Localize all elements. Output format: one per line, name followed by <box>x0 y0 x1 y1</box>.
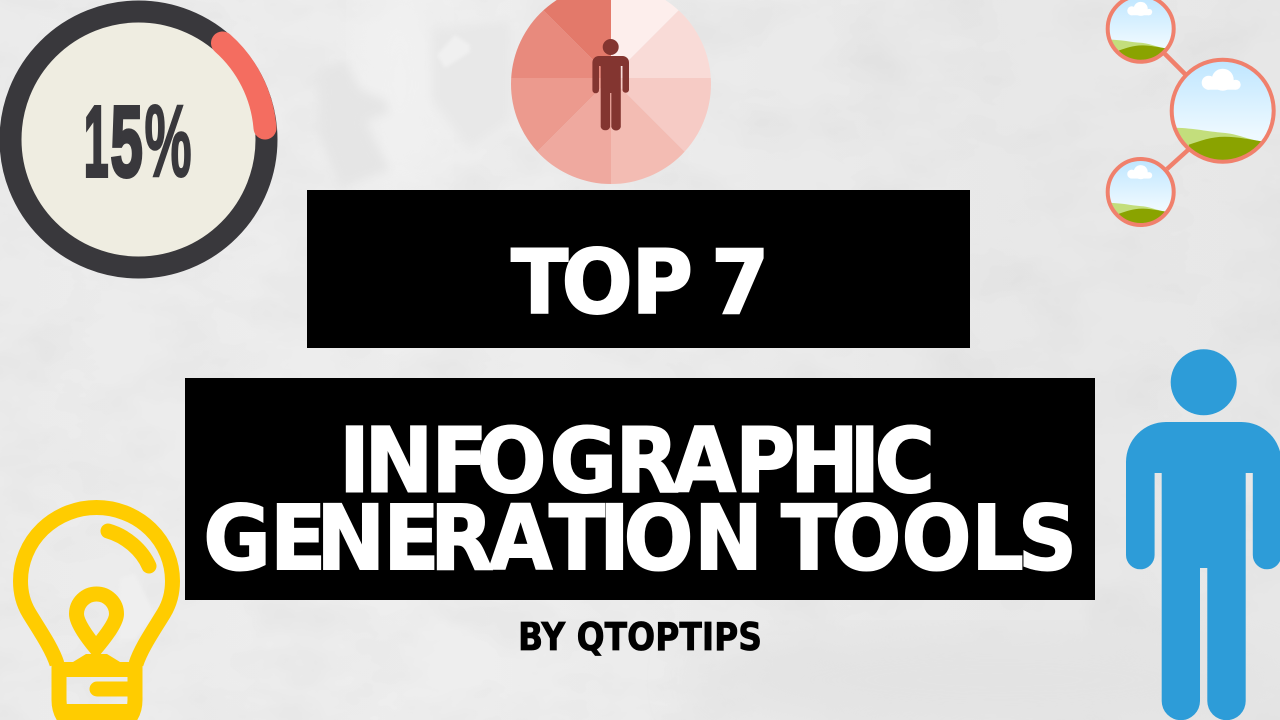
percent label: 1 <box>84 87 108 198</box>
percent label: 5 <box>110 87 143 198</box>
percent label <box>84 84 192 199</box>
icon: small person <box>592 39 629 130</box>
icon: large blue person <box>1126 349 1280 720</box>
byline: BY QTOPTIPS <box>518 615 762 659</box>
pie wheel with person <box>511 0 711 184</box>
top image circle <box>1107 0 1174 62</box>
title box: infographic generation tools: GENERATION TOOLS <box>204 488 1077 591</box>
progress ring: 15% <box>10 12 266 268</box>
bottom image circle <box>1107 159 1174 225</box>
ring highlight arc <box>222 43 265 128</box>
network of image circles <box>1107 0 1274 225</box>
icon: light bulb <box>20 508 172 720</box>
title box: infographic generation tools: INFOGRAPHIC <box>339 411 935 514</box>
large image circle <box>1171 60 1274 163</box>
percent label: % <box>144 84 192 199</box>
title box: infographic generation tools <box>185 378 1095 600</box>
title box: top 7 <box>307 190 970 348</box>
title box: top 7: TOP 7 <box>511 232 769 335</box>
